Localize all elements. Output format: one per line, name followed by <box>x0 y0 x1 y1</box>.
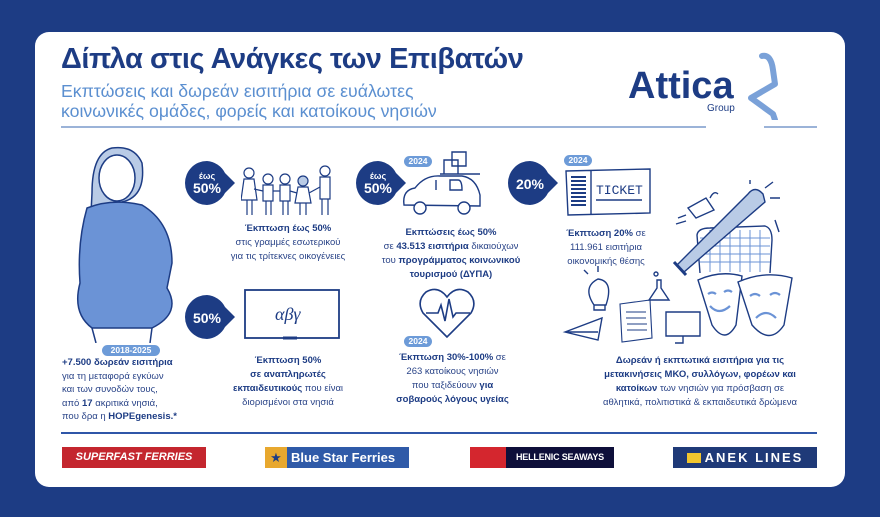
text: Έκπτωση 20% σε <box>566 228 646 239</box>
text: οικονομικής θέσης <box>567 256 645 267</box>
panel: large families <box>185 161 345 262</box>
logo: Hellenic Seaways <box>470 447 614 468</box>
panel: health <box>396 288 509 405</box>
text: μετακινήσεις ΜΚΟ, συλλόγων, φορέων και <box>604 369 796 380</box>
text: HOPEgenesis: +7.500 δωρεάν εισιτήρια <box>62 357 173 368</box>
icon: pregnant woman <box>76 146 173 343</box>
goal <box>697 226 772 273</box>
logo: Hellenic Seaways: HELLENIC SEAWAYS <box>516 452 604 462</box>
bubble: 50% <box>185 295 235 339</box>
icon: ticket <box>565 168 651 216</box>
text: Έκπτωση 50% <box>255 355 321 366</box>
text <box>566 228 646 267</box>
whistle <box>688 193 718 218</box>
text: HOPEgenesis: για τη μεταφορά εγκύων <box>62 370 164 382</box>
bubble: 20%: 20% <box>516 176 545 192</box>
divider bottom <box>61 432 817 434</box>
text: HOPEgenesis: που δρα η HOPEgenesis.* <box>62 411 177 422</box>
text: κατοίκων των νησιών για πρόσβαση σε <box>616 383 784 394</box>
bubble: 50% <box>364 180 393 196</box>
plane <box>565 318 602 340</box>
panel: pregnant woman <box>62 146 177 422</box>
subtitle <box>61 81 437 121</box>
text <box>603 355 797 408</box>
paper <box>620 300 652 342</box>
icon: car <box>403 151 481 215</box>
text <box>233 355 343 408</box>
text: Δωρεάν ή εκπτωτικά εισιτήρια για τις <box>616 355 784 366</box>
panel: economy tickets <box>508 155 651 267</box>
tag <box>404 336 432 347</box>
text: τουρισμού (ΔΥΠΑ) <box>410 269 492 280</box>
text: Εκπτώσεις έως 50% <box>405 227 497 238</box>
logo: Superfast: SUPERFAST FERRIES <box>76 451 192 463</box>
text <box>396 352 509 405</box>
logo: Blue Star: Blue Star Ferries <box>291 450 395 465</box>
logo: Attica Group <box>628 52 778 120</box>
logo: Attica Group: Group <box>707 103 735 114</box>
icon: board <box>244 289 340 340</box>
text: που ταξιδεύουν για <box>412 380 493 391</box>
text: σε αναπληρωτές <box>250 369 326 380</box>
text: διορισμένοι στα νησιά <box>242 397 334 408</box>
bubble: έως 50% <box>185 161 235 205</box>
masks <box>698 274 742 335</box>
flask <box>649 280 669 300</box>
text: σε 43.513 εισιτήρια δικαιούχων <box>384 241 518 252</box>
divider <box>61 126 706 128</box>
bubble <box>356 161 406 205</box>
text: στις γραμμές εσωτερικού <box>236 237 340 248</box>
logo: Blue Star <box>265 447 409 468</box>
icon: board: αβγ <box>275 304 301 324</box>
text: HOPEgenesis: και των συνοδών τους, <box>62 384 158 395</box>
icon: family <box>241 165 331 215</box>
bubble: έως 50%: έως <box>199 171 215 181</box>
panel: NGOs and events <box>562 180 797 408</box>
subtitle: Εκπτώσεις και δωρεάν εισιτήρια σε ευάλωτες <box>61 81 414 101</box>
text <box>230 223 345 262</box>
logo: Attica Group: Attica <box>628 65 734 107</box>
logo: ANEK <box>673 447 817 468</box>
bubble: 50%: 50% <box>193 310 222 326</box>
tag 2024: 2024 <box>409 156 427 166</box>
tag: 2024 <box>569 155 587 165</box>
text: Έκπτωση 30%-100% σε <box>399 352 506 363</box>
panel: social tourism <box>356 151 520 280</box>
tag: 2018-2025: 2018-2025 <box>111 345 151 355</box>
icon: cluster (sport, culture, education) <box>562 180 793 344</box>
text: HOPEgenesis: από 17 ακριτικά νησιά, <box>62 398 158 408</box>
logo: ANEK: ANEK LINES <box>705 450 803 465</box>
logo: Blue Star: ★ <box>270 450 282 465</box>
tag: 2024 <box>409 336 427 346</box>
text: Έκπτωση έως 50% <box>245 223 331 234</box>
icon: ticket: TICKET <box>596 183 643 198</box>
bubble: έως 50%: 50% <box>193 180 222 196</box>
bulb <box>584 266 609 310</box>
bubble: 20% <box>508 161 558 205</box>
text: για τις τρίτεκνες οικογένειες <box>231 251 345 262</box>
text: του προγράμματος κοινωνικού <box>382 255 520 266</box>
text <box>382 227 520 280</box>
text: αθλητικά, πολιτιστικά & εκπαιδευτικά δρώμενα <box>603 397 797 408</box>
screen <box>666 312 700 343</box>
text: σοβαρούς λόγους υγείας <box>396 394 509 405</box>
panel: teachers <box>185 289 343 408</box>
text: 111.961 εισιτήρια <box>570 242 642 253</box>
title: Δίπλα στις Ανάγκες των Επιβατών <box>61 43 523 75</box>
subtitle: κοινωνικές ομάδες, φορείς και κατοίκους νησιών <box>61 101 437 121</box>
bubble: έως <box>370 171 386 181</box>
vuvuzela <box>677 190 765 272</box>
icon: heart <box>419 288 475 338</box>
tag 2024 <box>404 156 432 167</box>
text: 263 κατοίκους νησιών <box>406 366 499 377</box>
logo: Superfast <box>62 447 206 468</box>
text: εκπαιδευτικούς που είναι <box>233 383 343 394</box>
tag <box>564 155 592 166</box>
text: HOPEgenesis <box>62 357 177 422</box>
tag: 2018-2025 <box>102 345 160 356</box>
